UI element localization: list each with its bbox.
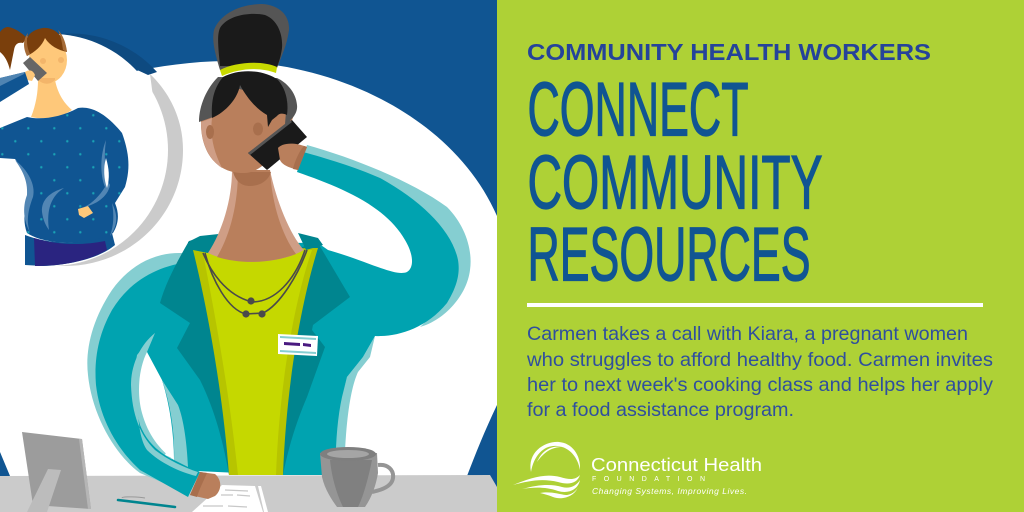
- left arm and torso: [87, 152, 459, 497]
- icon: coffee mug: [320, 447, 393, 507]
- body text: [526, 323, 993, 421]
- phone: [23, 57, 47, 81]
- logo name: Connecticut Health: [591, 454, 762, 475]
- left arm gap: [139, 352, 174, 460]
- hair bun: [213, 4, 289, 70]
- face: [201, 85, 295, 173]
- torso right highlight: [335, 336, 375, 452]
- panel: green text background: [497, 0, 1024, 512]
- raised hand: [278, 144, 307, 170]
- torso left highlight: [162, 380, 188, 467]
- phone: [248, 120, 307, 170]
- left hand on desk: [190, 472, 220, 499]
- left lapel: [160, 238, 240, 475]
- figure: Kiara: [0, 27, 135, 266]
- hair front: [199, 71, 297, 127]
- face: [29, 37, 67, 84]
- collar: [188, 233, 323, 253]
- sweater: [0, 108, 128, 242]
- title line 2: COMMUNITY: [528, 140, 822, 226]
- logo mark: [513, 442, 580, 498]
- illustration: Kiara in thought bubble: [0, 27, 183, 266]
- shirt centre: [203, 250, 312, 475]
- raised arm: [0, 72, 29, 102]
- title line 3: RESOURCES: [528, 212, 810, 298]
- ponytail: [0, 27, 27, 70]
- desk: [0, 475, 497, 512]
- left arm inner highlight: [131, 333, 198, 476]
- necklaces: [203, 250, 307, 317]
- logo: Connecticut Health Foundation: [513, 442, 762, 498]
- name badge: [278, 334, 318, 356]
- icon: pen: [118, 497, 175, 507]
- title line 1: CONNECT: [528, 68, 748, 152]
- hair band: [220, 63, 277, 76]
- title: [528, 68, 822, 298]
- thought bubble shadow: [52, 34, 183, 266]
- hand: [25, 70, 35, 81]
- heading: community health workers: COMMUNITY HEALTH WORKERS: [527, 39, 931, 65]
- neck: [31, 80, 72, 118]
- icon: monitor: [22, 432, 91, 512]
- sweater dots: [1, 114, 121, 234]
- divider: [527, 303, 983, 307]
- shirt: [193, 248, 318, 475]
- illustration: Carmen: [87, 4, 471, 497]
- body text: who struggles to afford healthy food. Carmen invites: [526, 349, 993, 371]
- sweater highlights: [15, 140, 116, 236]
- thought bubble: [0, 34, 168, 266]
- logo foundation: FOUNDATION: [592, 476, 705, 483]
- body text: for a food assistance program.: [527, 399, 794, 421]
- panel: illustration background: [0, 0, 497, 512]
- hair: [24, 28, 67, 56]
- logo tagline: Changing Systems, Improving Lives.: [592, 486, 747, 496]
- raised arm highlight: [303, 145, 471, 327]
- sweater arm gap: [104, 158, 109, 188]
- body text: Carmen takes a call with Kiara, a pregnant women: [527, 323, 968, 345]
- hand on hip: [78, 206, 93, 218]
- neck: [208, 170, 304, 262]
- trousers: [25, 233, 115, 266]
- icon: paper: [192, 485, 268, 512]
- right lapel: [270, 243, 350, 475]
- body text: her to next week's cooking class and helps her apply: [527, 374, 993, 396]
